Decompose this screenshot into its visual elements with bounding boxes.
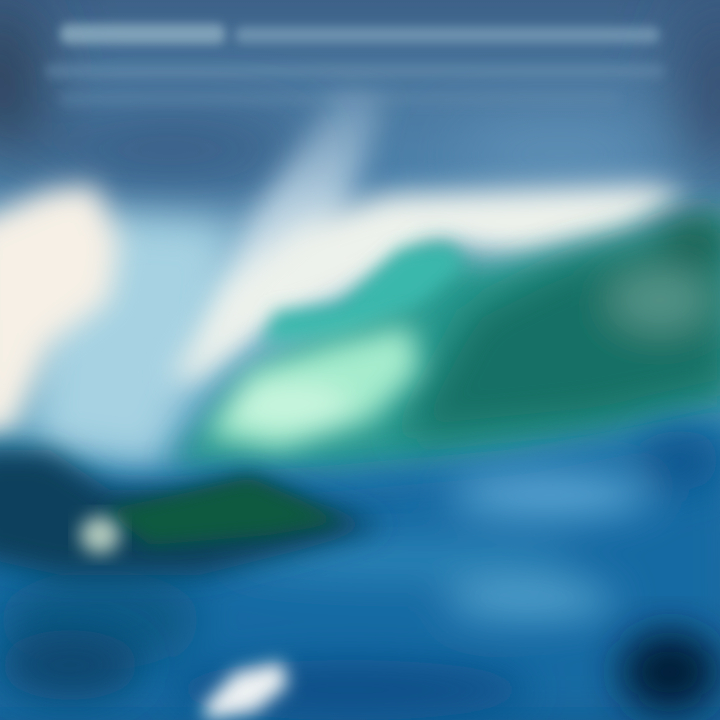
dark lower right swell	[620, 630, 720, 714]
dark sky corners	[0, 0, 720, 180]
light beam	[185, 90, 385, 350]
blurred heading text band	[45, 24, 665, 106]
teal crest accent	[262, 245, 465, 345]
deep blue sea	[0, 420, 720, 720]
sea colour patches	[0, 430, 720, 720]
mint wave highlight	[205, 325, 420, 450]
dark lower left swell	[0, 630, 140, 700]
white foam at bottom	[205, 662, 288, 720]
green headland	[105, 478, 345, 545]
dark green right wave shading	[400, 215, 720, 440]
dark headland	[0, 450, 385, 575]
green right wave body	[170, 210, 720, 470]
pale blue spray area	[30, 215, 230, 470]
white left foam	[0, 185, 120, 440]
pale foam blob	[80, 516, 120, 554]
white wave crest	[170, 185, 690, 380]
